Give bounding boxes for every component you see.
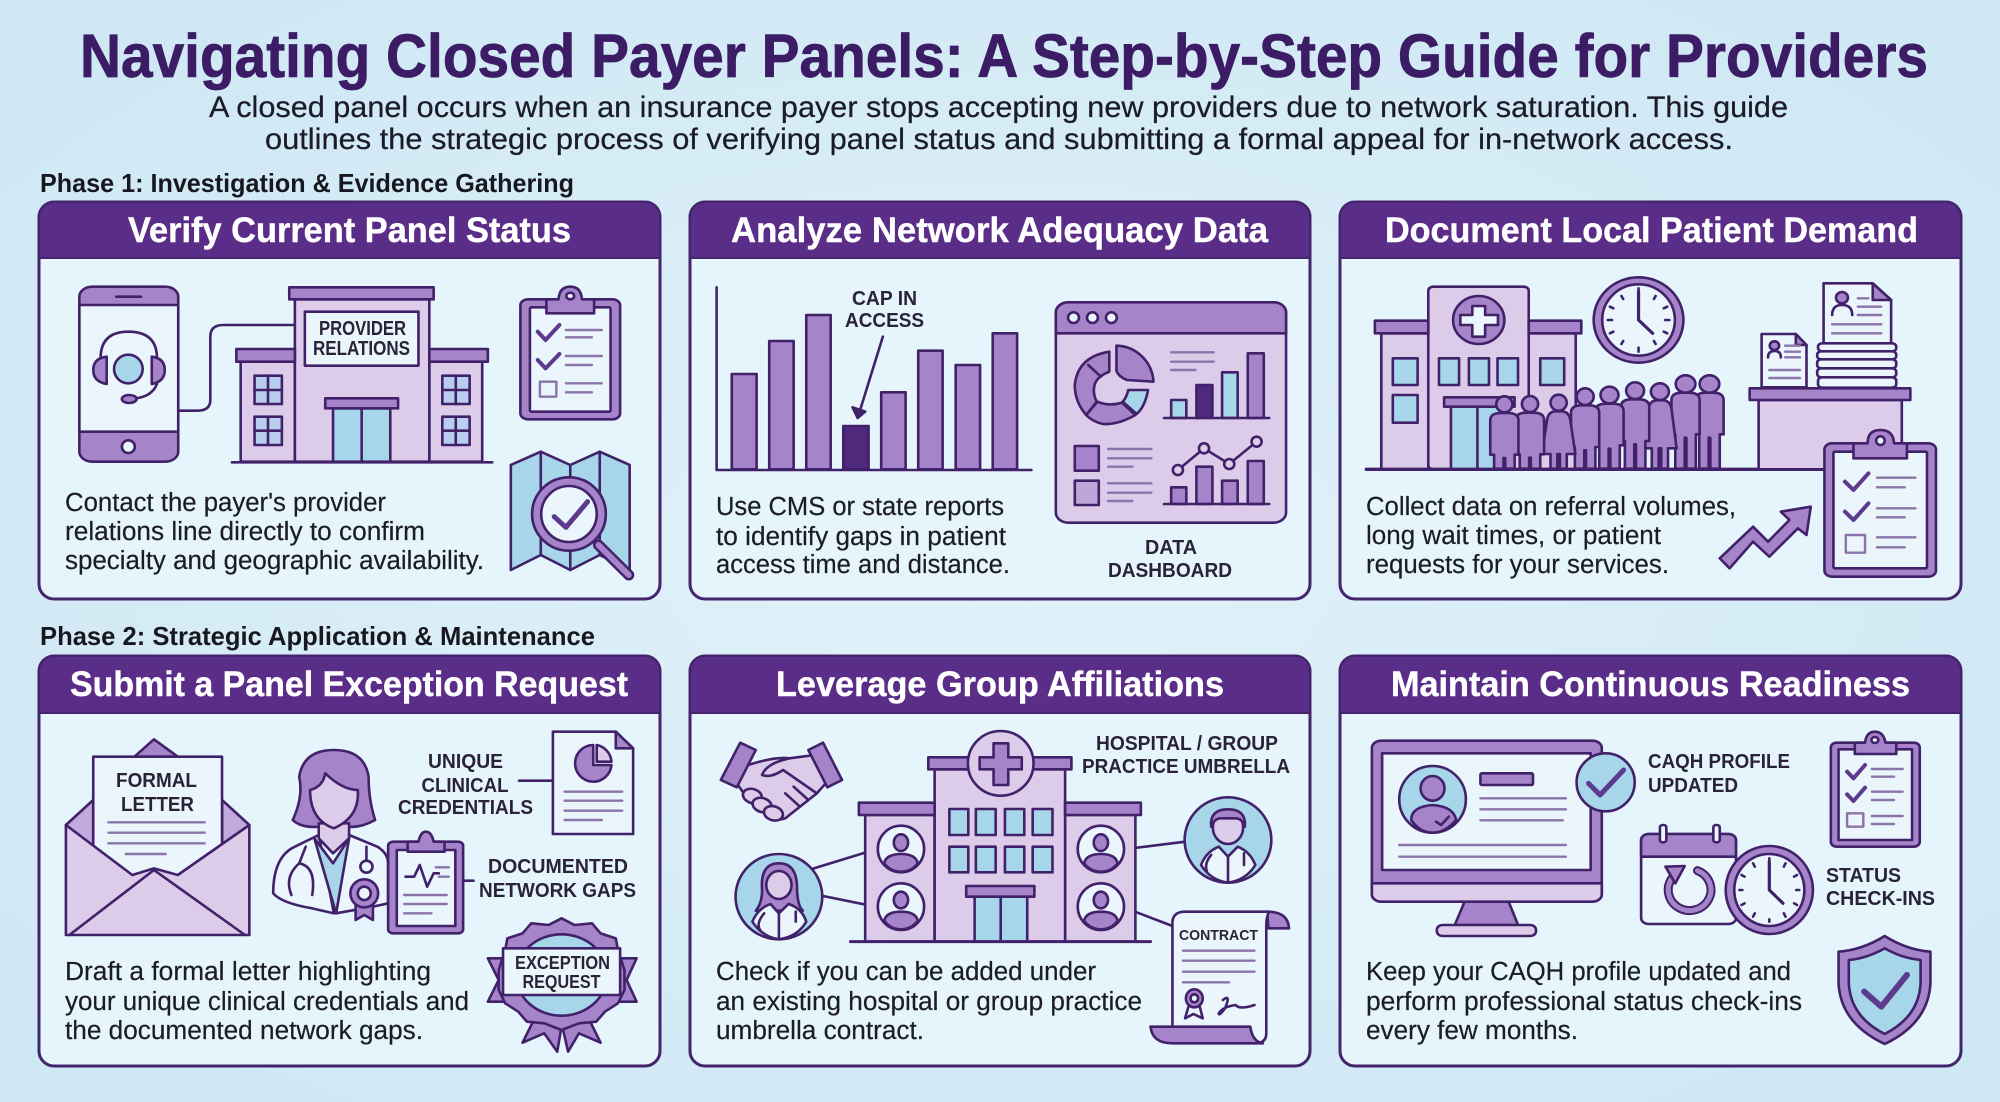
icon: monitor with profile <box>1372 741 1602 936</box>
icon: envelope with letter <box>66 739 249 935</box>
bar chart: gap in access <box>717 287 1031 470</box>
heading: phase 1: Phase 1: Investigation & Evidence Gathering <box>40 168 574 198</box>
description text: access time and distance. <box>716 551 1010 579</box>
description text: perform professional status check-ins <box>1366 988 1802 1016</box>
panel heading: Verify Current Panel Status <box>128 211 571 250</box>
label: hospital group practice umbrella: HOSPITAL / GROUP <box>1096 733 1278 755</box>
icon: calendar with refresh <box>1641 825 1736 924</box>
label: documented network gaps <box>479 856 636 902</box>
icon: rising arrow <box>1720 507 1811 568</box>
icon: data dashboard <box>1056 302 1286 523</box>
icon: check badge <box>1577 753 1635 811</box>
description text: Use CMS or state reports <box>716 493 1004 521</box>
icon: report document with pie chart <box>519 732 633 834</box>
label: cap in access <box>845 288 924 332</box>
icon: clock <box>1726 846 1813 934</box>
icon: phone with headset <box>79 287 295 462</box>
panel heading: Analyze Network Adequacy Data <box>731 211 1269 250</box>
label: documented network gaps: NETWORK GAPS <box>479 880 636 902</box>
icon: male doctor avatar <box>1185 797 1271 883</box>
description text: specialty and geographic availability. <box>65 547 484 575</box>
icon: provider relations building <box>232 287 492 462</box>
heading: phase 2: Phase 2: Strategic Application & Maintenance <box>40 621 595 651</box>
description text: umbrella contract. <box>716 1017 924 1045</box>
label: unique clinical credentials: CREDENTIALS <box>398 797 533 819</box>
description text: Keep your CAQH profile updated and <box>1366 958 1791 986</box>
label: unique clinical credentials <box>398 751 533 819</box>
description text: Contact the payer's provider <box>65 489 387 517</box>
intro text: A closed panel occurs when an insurance payer stops accepting new providers due to network saturation. This guide <box>209 91 1788 124</box>
label: exception request <box>515 953 610 992</box>
label: data dashboard: DATA <box>1145 537 1197 559</box>
label: data dashboard: DASHBOARD <box>1108 560 1232 582</box>
description text <box>65 489 484 575</box>
description text: to identify gaps in patient <box>716 523 1006 551</box>
description text <box>716 958 1142 1045</box>
description text: your unique clinical credentials and <box>65 988 469 1016</box>
panel: submit a panel exception request <box>39 656 660 1066</box>
label: caqh profile updated <box>1648 751 1790 797</box>
label: exception request: REQUEST <box>522 972 601 992</box>
label: unique clinical credentials: CLINICAL <box>422 775 508 797</box>
description text <box>716 493 1010 579</box>
label: provider relations: PROVIDER <box>319 318 406 340</box>
icon: exception request badge <box>488 918 637 1052</box>
description text <box>65 958 469 1045</box>
label: status check-ins: STATUS <box>1826 865 1901 887</box>
panel heading: Submit a Panel Exception Request <box>70 665 628 704</box>
description text <box>1366 958 1802 1045</box>
icon: clipboard checklist <box>1831 732 1920 847</box>
connector lines <box>814 842 1185 926</box>
panel: document local patient demand <box>1340 202 1961 599</box>
description text: an existing hospital or group practice <box>716 988 1142 1016</box>
panel: verify current panel status <box>39 202 660 599</box>
icon: queue of patients <box>1366 375 1824 469</box>
description text: long wait times, or patient <box>1366 522 1661 550</box>
label: formal letter: LETTER <box>121 794 195 816</box>
icon: clipboard with heartbeat <box>388 832 474 933</box>
label: caqh profile updated: UPDATED <box>1648 775 1738 797</box>
icon: hospital with staff <box>850 731 1151 942</box>
label: cap in access: ACCESS <box>845 310 924 332</box>
description text: Draft a formal letter highlighting <box>65 958 431 986</box>
panel: maintain continuous readiness <box>1340 656 1961 1066</box>
icon: hospital building <box>1375 287 1581 469</box>
description text: the documented network gaps. <box>65 1017 423 1045</box>
icon: contract scroll <box>1151 912 1289 1043</box>
label: status check-ins <box>1826 865 1935 910</box>
icon: wall clock <box>1594 277 1683 363</box>
label: status check-ins: CHECK-INS <box>1826 888 1935 910</box>
label: contract: CONTRACT <box>1179 927 1258 944</box>
label: hospital group practice umbrella <box>1082 733 1290 778</box>
label: documented network gaps: DOCUMENTED <box>488 856 628 878</box>
label: cap in access: CAP IN <box>852 288 917 310</box>
label: exception request: EXCEPTION <box>515 953 610 973</box>
label: provider relations: RELATIONS <box>313 338 410 360</box>
label: unique clinical credentials: UNIQUE <box>428 751 503 773</box>
icon: clipboard checklist <box>1824 430 1936 577</box>
icon: female doctor avatar <box>736 854 822 939</box>
icon: shield with check <box>1839 936 1930 1044</box>
label: caqh profile updated: CAQH PROFILE <box>1648 751 1790 773</box>
label: formal letter: FORMAL <box>116 770 197 792</box>
description text <box>1366 493 1736 579</box>
panel heading: Document Local Patient Demand <box>1385 211 1918 250</box>
intro text <box>209 91 1788 156</box>
icon: clipboard checklist <box>520 287 620 419</box>
label: hospital group practice umbrella: PRACTICE UMBRELLA <box>1082 756 1290 778</box>
panel heading: Maintain Continuous Readiness <box>1391 665 1910 704</box>
label: formal letter <box>116 770 197 816</box>
panel: leverage group affiliations <box>690 656 1310 1066</box>
description text: every few months. <box>1366 1017 1578 1045</box>
description text: Check if you can be added under <box>716 958 1097 986</box>
panel heading: Leverage Group Affiliations <box>776 665 1224 704</box>
panel: analyze network adequacy data <box>690 202 1310 599</box>
icon: handshake <box>721 743 842 824</box>
icon: front desk with paperwork <box>1750 283 1910 469</box>
description text: relations line directly to confirm <box>65 518 425 546</box>
label: provider relations <box>313 318 410 360</box>
description text: requests for your services. <box>1366 551 1669 579</box>
icon: map with magnifier <box>511 452 630 575</box>
description text: Collect data on referral volumes, <box>1366 493 1736 521</box>
icon: female doctor <box>273 750 388 920</box>
label: data dashboard <box>1108 537 1232 582</box>
intro text: outlines the strategic process of verifying panel status and submitting a formal appeal for in-network access. <box>265 123 1733 156</box>
